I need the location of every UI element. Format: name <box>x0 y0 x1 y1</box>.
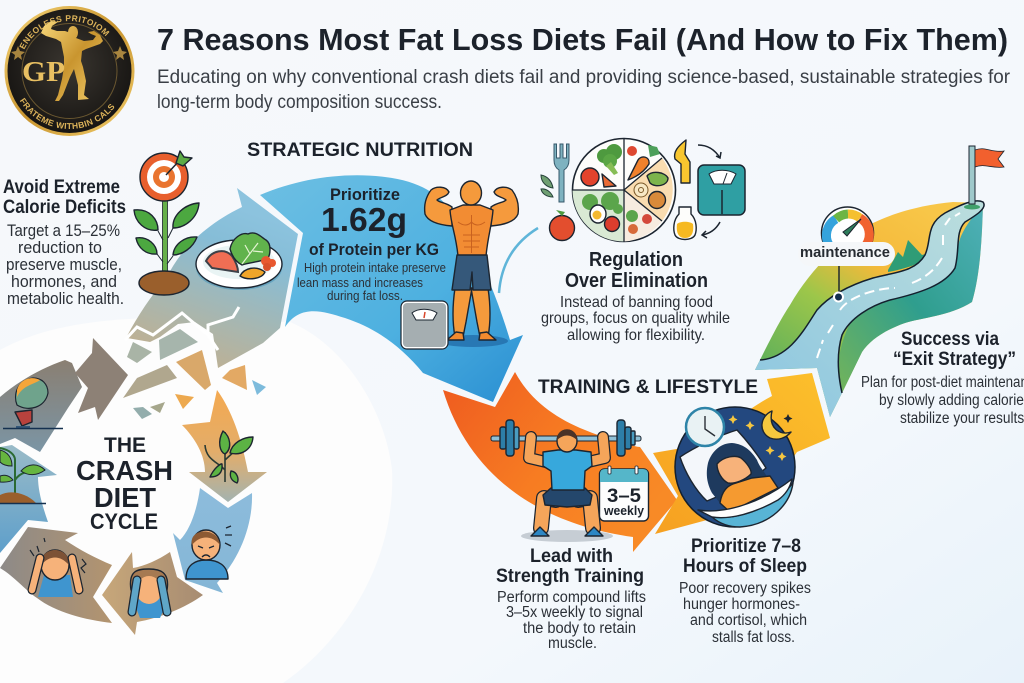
onion and herb <box>634 183 648 197</box>
icon: bathroom scale <box>401 301 448 349</box>
icon: balanced food plate <box>541 138 745 242</box>
road outlines <box>760 201 984 393</box>
salad with egg <box>582 194 598 210</box>
lettuce <box>230 233 270 265</box>
cycle arrow: stress <box>0 527 112 623</box>
carrot <box>628 157 649 180</box>
icon: flexing man <box>425 181 518 347</box>
subtitle: Educating on why conventional crash diets fail and providing science-based, sustainable strategies for <box>157 67 1011 88</box>
text: prioritize protein: Prioritize <box>330 185 400 204</box>
blue under blanket <box>712 483 793 527</box>
barbell <box>491 436 641 441</box>
cycle figure: seedling <box>0 448 46 504</box>
logo ring text bottom: FRATEME WITHBIN CALS <box>20 98 114 129</box>
soil <box>139 271 189 295</box>
cycle arrow: irritable <box>173 488 252 593</box>
stem <box>162 200 168 274</box>
measuring spoon <box>675 140 690 183</box>
text: avoid extreme calorie deficits <box>3 177 126 308</box>
shorts <box>452 255 491 290</box>
cookie <box>648 192 666 208</box>
text: exit strategy: Success via <box>901 329 999 350</box>
text: regulation over elimination <box>541 249 730 344</box>
text: regulation over elimination: groups, focus on quality while <box>541 310 730 327</box>
yellow sleep arrow <box>653 373 830 534</box>
text: sleep: Poor recovery spikes <box>679 580 811 597</box>
target <box>140 153 188 201</box>
text: sleep <box>679 536 811 646</box>
icon: target plant <box>134 151 199 295</box>
apple slice <box>581 168 599 186</box>
squash <box>240 268 265 279</box>
blue nutrition arrow <box>260 175 523 402</box>
cycle figure: fatigued person with meal <box>3 378 63 429</box>
broccoli <box>597 149 611 163</box>
text: avoid extreme calorie deficits: Avoid Extreme <box>3 177 120 198</box>
legs <box>541 498 593 528</box>
text: prioritize protein: of Protein per KG <box>309 241 439 259</box>
text: sleep: hunger hormones- <box>683 596 800 613</box>
cycle figure: irritated man <box>186 526 232 579</box>
apple <box>550 216 574 240</box>
text: strength training: muscle. <box>548 635 597 652</box>
exit strategy road <box>755 201 984 417</box>
pillow <box>680 430 766 501</box>
hill background <box>755 202 983 417</box>
text: sleep: Prioritize 7–8 <box>691 536 801 557</box>
broken shards <box>123 329 266 419</box>
logo stars <box>11 46 127 60</box>
text: exit strategy <box>861 329 1024 427</box>
salmon <box>206 251 238 272</box>
text: avoid extreme calorie deficits: Target a 15–25% <box>7 222 120 240</box>
text: sleep: stalls fat loss. <box>712 629 795 646</box>
blanket <box>698 479 792 518</box>
left arm <box>425 187 452 226</box>
text: strength training: Lead with <box>530 546 613 567</box>
text: strength training: 3–5x weekly to signal <box>506 604 643 621</box>
clock <box>686 408 724 446</box>
logo ring text top: ENEOLESS PRITOIOM <box>19 15 110 50</box>
head <box>557 430 577 452</box>
text: strength training: Perform compound lifts <box>497 589 646 606</box>
blue connector curve <box>499 228 538 293</box>
logo initials: GP <box>22 56 65 88</box>
text: regulation over elimination: Instead of banning food <box>560 294 713 311</box>
calendar 3-5 weekly <box>600 466 648 521</box>
text: strength training: Strength Training <box>496 566 644 587</box>
text: regulation over elimination: Over Elimination <box>565 270 708 292</box>
icon: sleeping person <box>675 407 795 527</box>
text: prioritize protein: lean mass and increases <box>297 275 423 290</box>
cycle title: CRASH <box>76 455 173 486</box>
calendar number: 3–5 <box>607 486 641 507</box>
cycle title: THE <box>104 434 146 457</box>
cycle title <box>76 434 173 534</box>
moon <box>762 411 791 439</box>
white swoosh behind the cycle <box>0 318 392 683</box>
text: strength training: the body to retain <box>523 620 636 637</box>
oil bottle <box>674 207 696 240</box>
orange training arrow <box>443 372 677 552</box>
stars <box>728 415 786 461</box>
vegetables mix <box>626 210 638 222</box>
floor shadow <box>521 530 613 542</box>
text: avoid extreme calorie deficits: preserve muscle, <box>6 256 122 274</box>
text: prioritize protein <box>297 185 446 303</box>
cycle arrow: binge <box>0 360 82 452</box>
text: avoid extreme calorie deficits: Calorie Deficits <box>3 197 126 218</box>
head <box>460 181 482 205</box>
maintenance pointer <box>838 265 840 296</box>
cycle arrow: rebound <box>75 338 128 420</box>
fork <box>554 144 569 202</box>
shirt <box>720 476 778 512</box>
hair <box>707 443 767 503</box>
text: avoid extreme calorie deficits: hormones, and <box>11 273 117 291</box>
cycle arrow: regrow <box>0 445 57 553</box>
cycle arrow: sprout <box>182 390 267 502</box>
maintenance label <box>798 242 895 266</box>
cycle figure: crying person <box>130 569 168 618</box>
subtitle: long-term body composition success. <box>157 92 442 113</box>
maintenance label: maintenance <box>800 245 890 261</box>
mountain <box>888 240 932 272</box>
road surface <box>755 201 984 417</box>
flag at end of road <box>964 146 1004 210</box>
right arm <box>491 187 518 226</box>
leaves <box>134 203 199 255</box>
calendar caption: weekly <box>603 504 644 518</box>
torso <box>450 205 493 256</box>
text: avoid extreme calorie deficits: reduction to <box>18 239 102 257</box>
legs <box>453 288 490 337</box>
title: 7 Reasons Most Fat Loss Diets Fail (And How to Fix Them) <box>157 22 1008 57</box>
road dashes <box>817 213 960 358</box>
cycle arrow: fatigue <box>102 552 203 635</box>
icon: squatting lifter <box>491 420 641 542</box>
face <box>717 456 751 483</box>
dart <box>166 161 179 175</box>
text: avoid extreme calorie deficits: metabolic health. <box>7 290 124 308</box>
feet <box>531 527 603 536</box>
gauge icon <box>822 207 874 259</box>
text: prioritize protein: during fat loss. <box>327 288 403 303</box>
floor shadow <box>438 335 508 347</box>
scale <box>698 165 745 215</box>
icon: protein plate <box>196 233 282 290</box>
maintenance marker <box>834 292 843 302</box>
shorts <box>543 488 592 507</box>
shirt <box>543 450 592 490</box>
cycle figure: stressed person <box>30 538 86 597</box>
tomato <box>261 256 271 266</box>
logo bodybuilder <box>41 21 103 101</box>
text: regulation over elimination: allowing for flexibility. <box>567 327 705 344</box>
cycle title: DIET <box>94 482 156 513</box>
teal bank under road <box>838 204 983 393</box>
heading: strategic nutrition: STRATEGIC NUTRITION <box>247 140 473 161</box>
text: sleep: Hours of Sleep <box>683 556 807 577</box>
arms <box>529 437 605 462</box>
heading: training and lifestyle: TRAINING & LIFESTYLE <box>538 377 758 398</box>
text: sleep: and cortisol, which <box>690 612 807 629</box>
crash diet cycle ring <box>0 338 267 635</box>
text: prioritize protein: High protein intake preserve <box>304 260 446 275</box>
logo badge <box>4 6 134 136</box>
icon: sprout in cycle <box>205 431 253 483</box>
cycle title: CYCLE <box>90 509 158 534</box>
text: strength training <box>496 546 646 652</box>
cycle arrows <box>698 145 721 238</box>
herb leaves <box>541 175 553 197</box>
upper faded arrow rising from the cycle <box>125 188 298 368</box>
plate sectors <box>624 158 673 221</box>
subtitle <box>157 67 1011 113</box>
text: prioritize protein: 1.62g <box>321 201 407 238</box>
text: regulation over elimination: Regulation <box>589 249 683 271</box>
